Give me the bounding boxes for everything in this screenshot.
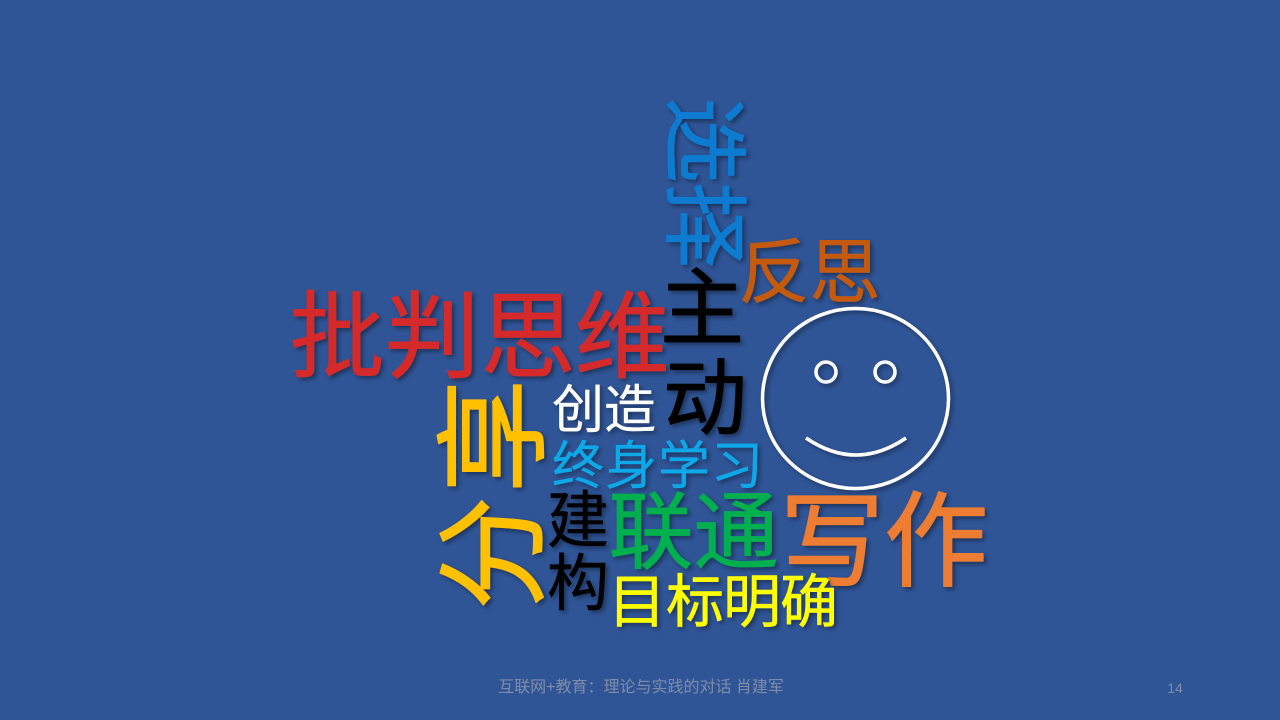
word: 终身学习: 身 xyxy=(605,438,657,496)
word: 写作: 写 xyxy=(780,485,884,601)
word: 主动 xyxy=(660,262,747,446)
word: 联通: 通 xyxy=(693,486,779,581)
icon: smiley face xyxy=(762,308,948,488)
word: 主动: 主 xyxy=(660,262,744,356)
word: 终身学习: 习 xyxy=(711,438,763,496)
word: 终身学习 xyxy=(552,438,763,496)
word: 联通 xyxy=(608,486,779,581)
word: 创造 xyxy=(552,382,656,440)
word: 目标明确: 目 xyxy=(608,570,666,635)
word: 分享 rotated: 享 xyxy=(432,379,559,493)
word: 选择 rotated: 择 xyxy=(655,182,751,268)
word: 分享 rotated xyxy=(432,379,559,610)
word: 终身学习: 终 xyxy=(552,438,604,496)
word: 批判思维: 思 xyxy=(480,285,576,391)
word: 创造: 创 xyxy=(552,382,604,440)
word: 批判思维: 批 xyxy=(289,285,385,391)
page number: 14 xyxy=(1167,680,1183,696)
word: 终身学习: 学 xyxy=(658,438,710,496)
word: 反思: 思 xyxy=(809,234,881,313)
word: 主动: 动 xyxy=(663,352,747,446)
word: 反思: 反 xyxy=(738,234,810,313)
word: 创造: 造 xyxy=(604,382,656,440)
word: 目标明确: 确 xyxy=(780,570,838,635)
word: 写作 xyxy=(780,485,988,601)
word: 选择 rotated xyxy=(655,97,751,268)
word: 联通: 联 xyxy=(608,486,694,581)
word: 建构: 建 xyxy=(547,487,609,556)
word: 目标明确 xyxy=(608,570,838,635)
word: 建构 xyxy=(547,487,609,619)
footer text: 互联网+教育：理论与实践的对话 肖建军 xyxy=(498,678,784,696)
word: 写作: 作 xyxy=(884,485,988,601)
word: 分享 rotated: 分 xyxy=(432,496,559,610)
word: 批判思维: 判 xyxy=(384,285,480,391)
word: 批判思维 xyxy=(289,285,670,391)
word: 建构: 构 xyxy=(547,550,609,619)
word: 目标明确: 明 xyxy=(723,570,781,635)
word: 选择 rotated: 选 xyxy=(655,97,751,183)
word: 批判思维: 维 xyxy=(574,285,670,391)
word: 反思 xyxy=(738,234,881,313)
word: 目标明确: 标 xyxy=(666,570,724,635)
